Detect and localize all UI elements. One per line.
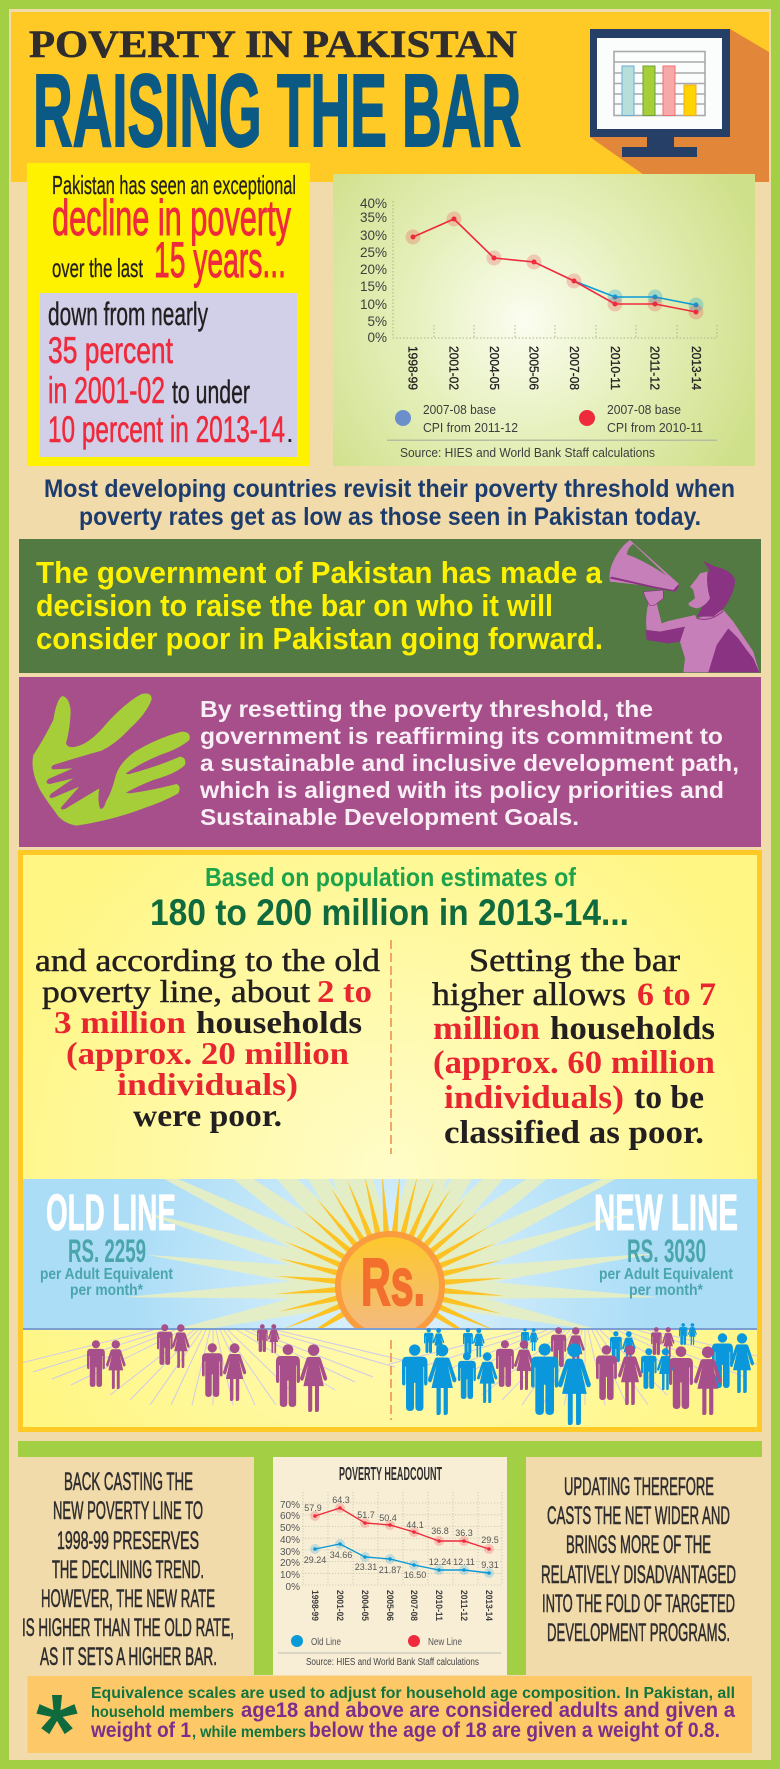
old line label: OLD LINE	[46, 1184, 176, 1241]
x axis labels: 2011-12	[458, 1590, 469, 1621]
x axis labels	[406, 346, 704, 390]
footnote text: , while members	[192, 1724, 306, 1741]
new line label	[594, 1184, 738, 1299]
legend	[395, 402, 703, 435]
y axis labels: 20%	[280, 1558, 300, 1569]
text: updating net wider	[541, 1473, 736, 1647]
old line label: per Adult Equivalent	[40, 1266, 173, 1283]
icon: person with megaphone	[609, 540, 759, 672]
panel: line chart poverty trend	[333, 174, 755, 466]
footnote text: weight of 1	[90, 1719, 191, 1742]
y axis labels: 25%	[360, 245, 387, 260]
x axis labels: 2010-11	[433, 1590, 444, 1622]
people: old line households	[87, 1324, 327, 1412]
text: back casting: 1998-99 PRESERVES	[57, 1527, 199, 1555]
legend: Old Line	[311, 1636, 341, 1648]
x axis labels: 1998-99	[309, 1590, 320, 1621]
x axis labels: 2004-05	[359, 1590, 370, 1622]
y axis labels: 30%	[280, 1547, 300, 1558]
y axis labels: 35%	[360, 210, 387, 225]
x axis labels: 2011-12	[648, 346, 662, 390]
text: new poverty line: higher allows	[432, 977, 626, 1013]
data labels: 23.31	[355, 1562, 377, 1572]
data labels: 9.31	[481, 1560, 499, 1570]
y axis labels: 50%	[280, 1523, 300, 1534]
text: exceptional decline: over the last	[52, 253, 143, 283]
icon: asterisk	[36, 1695, 78, 1734]
new line label: RS. 3030	[627, 1233, 706, 1269]
old line label	[40, 1184, 176, 1299]
commitment text: a sustainable and inclusive development path,	[200, 750, 739, 776]
panel: down from nearly	[40, 293, 297, 457]
panel: down from nearly: .	[286, 417, 294, 448]
heading: population estimates: 180 to 200 million in 2013-14...	[150, 892, 629, 933]
text: new poverty line: Setting the bar	[469, 943, 680, 979]
panel: down from nearly: 10 percent in 2013-14	[48, 409, 285, 450]
text: developing countries threshold: poverty rates get as low as those seen in Pakistan today.	[79, 503, 701, 531]
data labels: 50.4	[379, 1513, 397, 1523]
y axis labels: 60%	[280, 1511, 300, 1522]
text: back casting: BACK CASTING THE	[64, 1468, 193, 1496]
x axis labels: 2007-08	[408, 1590, 419, 1621]
text: developing countries threshold	[44, 475, 735, 531]
x axis labels: 2004-05	[487, 346, 502, 390]
series: blue line	[574, 281, 704, 312]
old line label: RS. 2259	[68, 1233, 146, 1269]
x axis labels	[309, 1590, 494, 1622]
commitment text: By resetting the poverty threshold, the	[200, 696, 653, 722]
header	[11, 12, 769, 182]
text: exceptional decline: Pakistan has seen an exceptional	[52, 170, 296, 200]
x axis labels: 2013-14	[483, 1590, 494, 1622]
text: old poverty line: households	[196, 1004, 362, 1040]
chart title: POVERTY HEADCOUNT	[339, 1464, 442, 1484]
series: new line	[310, 1503, 494, 1554]
text: old poverty line: were poor.	[133, 1097, 282, 1133]
decision text: The government of Pakistan has made a	[36, 555, 603, 590]
y axis labels: 40%	[360, 196, 387, 211]
data labels: 12.24	[429, 1557, 451, 1567]
text: new poverty line: million	[433, 1011, 540, 1047]
text: old poverty line	[35, 942, 380, 1133]
panel: government decision	[19, 539, 761, 673]
chart grid	[302, 1492, 502, 1585]
y axis labels: 10%	[360, 297, 387, 312]
text: new poverty line: to be	[634, 1080, 704, 1116]
x axis labels: 2005-06	[526, 346, 542, 390]
footnote text: Equivalence scales are used to adjust for household age composition. In Pakistan, all	[91, 1685, 735, 1702]
x axis labels: 1998-99	[406, 346, 420, 390]
text: old poverty line: individuals)	[117, 1066, 298, 1102]
source note: Source: HIES and World Bank Staff calculations	[306, 1657, 479, 1668]
panel: poverty headcount chart	[273, 1457, 507, 1675]
x axis labels: 2005-06	[384, 1590, 395, 1621]
text: exceptional decline: 15 years...	[154, 232, 286, 288]
text: old poverty line: and according to the old	[35, 942, 380, 978]
text: new poverty line: classified as poor.	[444, 1115, 704, 1151]
y axis labels: 5%	[367, 314, 387, 329]
footnote text	[90, 1685, 735, 1742]
decision text: consider poor in Pakistan going forward.	[36, 621, 603, 656]
text: back casting: HOWEVER, THE NEW RATE	[41, 1585, 215, 1613]
footnote text: household members	[91, 1704, 234, 1721]
decision text	[36, 555, 603, 656]
new line label: per month*	[629, 1282, 704, 1299]
y axis labels: 15%	[360, 279, 387, 294]
text: new poverty line	[432, 943, 716, 1151]
data labels: 21.87	[379, 1565, 401, 1575]
y axis labels: 10%	[280, 1570, 300, 1581]
panel: equivalence scales footnote	[28, 1676, 752, 1753]
x axis labels: 2001-02	[334, 1590, 345, 1621]
data labels: 36.8	[431, 1526, 449, 1536]
text: developing countries threshold: Most developing countries revisit their poverty threshold when	[44, 475, 735, 503]
text: exceptional decline	[52, 170, 296, 288]
data labels: 16.50	[404, 1570, 426, 1580]
text: new poverty line: individuals)	[444, 1080, 624, 1116]
x axis labels: 2010-11	[608, 346, 623, 390]
text: new poverty line: (approx. 60 million	[433, 1045, 715, 1081]
text: back casting	[22, 1468, 234, 1671]
title: poverty in pakistan: POVERTY IN PAKISTAN	[29, 23, 517, 66]
old line label: per month*	[70, 1282, 144, 1299]
source note: Source: HIES and World Bank Staff calculations	[400, 445, 655, 460]
data labels: 44.1	[406, 1520, 424, 1530]
y axis labels: 0%	[286, 1582, 300, 1593]
x axis labels: 2007-08	[567, 346, 582, 390]
text: back casting: THE DECLINING TREND.	[52, 1556, 204, 1584]
x axis labels: 2013-14	[689, 346, 704, 390]
y axis labels: 30%	[360, 228, 387, 243]
ground rays	[17, 1330, 780, 1405]
text: exceptional decline: decline in poverty	[52, 190, 291, 246]
data labels: 64.3	[332, 1495, 350, 1505]
data labels: 29.5	[481, 1535, 499, 1545]
text: back casting: IS HIGHER THAN THE OLD RATE,	[22, 1614, 234, 1642]
people: new line households	[402, 1323, 754, 1425]
y axis labels	[280, 1500, 300, 1593]
text: old poverty line: 2 to	[317, 973, 372, 1009]
legend: CPI from 2010-11	[607, 420, 703, 435]
legend: 2007-08 base	[607, 402, 681, 417]
legend	[291, 1635, 462, 1648]
data labels: 29.24	[304, 1555, 326, 1565]
panel: down from nearly: down from nearly	[48, 296, 208, 332]
icon: hands	[32, 693, 190, 826]
sky band	[23, 1179, 757, 1329]
commitment text: Sustainable Development Goals.	[200, 804, 579, 830]
legend: New Line	[428, 1636, 462, 1648]
commitment text: government is reaffirming its commitment to	[200, 723, 723, 749]
text: old poverty line: poverty line, about	[42, 973, 310, 1009]
text: new poverty line: 6 to 7	[637, 977, 716, 1013]
decision text: decision to raise the bar on who it will	[36, 588, 553, 623]
footnote text: age18 and above are considered adults and given a	[241, 1699, 735, 1722]
series: red line	[406, 212, 704, 320]
series: old line	[310, 1539, 494, 1578]
text: old poverty line: 3 million	[54, 1004, 186, 1040]
data labels	[304, 1495, 499, 1580]
panel: down from nearly: to under	[172, 374, 250, 410]
text: back casting: AS IT SETS A HIGHER BAR.	[40, 1643, 217, 1671]
heading: population estimates: Based on population estimates of	[205, 862, 576, 892]
band: lower section green	[18, 1441, 762, 1675]
panel: resetting the threshold	[19, 677, 761, 847]
heading: population estimates	[150, 862, 629, 933]
commitment text	[199, 696, 739, 830]
data labels: 12.11	[453, 1557, 475, 1567]
x axis labels: 2001-02	[446, 346, 462, 390]
text: back casting: NEW POVERTY LINE TO	[53, 1497, 203, 1525]
panel: down from nearly: in 2001-02	[48, 370, 165, 411]
data labels: 57.9	[304, 1503, 322, 1513]
icon: monitor with bar chart	[590, 29, 769, 182]
sun currency label: Rs.	[361, 1245, 425, 1320]
commitment text: which is aligned with its policy priorities and	[199, 777, 724, 803]
y axis labels: 0%	[367, 330, 387, 345]
y axis labels: 40%	[280, 1535, 300, 1546]
y axis labels: 70%	[280, 1500, 300, 1511]
chart axes	[393, 201, 717, 338]
y axis labels	[360, 196, 387, 345]
y axis labels: 20%	[360, 262, 387, 277]
legend: CPI from 2011-12	[423, 420, 518, 435]
divider top	[390, 940, 392, 1154]
new line label: per Adult Equivalent	[599, 1266, 733, 1283]
footnote text: below the age of 18 are given a weight of 0.8.	[309, 1719, 720, 1742]
data labels: 36.3	[455, 1528, 473, 1538]
panel: population estimates and poverty lines	[17, 852, 780, 1430]
panel: down from nearly: 35 percent	[48, 330, 174, 371]
legend: 2007-08 base	[423, 402, 496, 417]
sun with rays	[124, 1179, 659, 1328]
text: new poverty line: households	[550, 1011, 715, 1047]
text: old poverty line: (approx. 20 million	[66, 1035, 349, 1071]
data labels: 34.66	[330, 1550, 352, 1560]
panel: decline in poverty	[27, 163, 310, 466]
data labels: 51.7	[357, 1510, 375, 1520]
